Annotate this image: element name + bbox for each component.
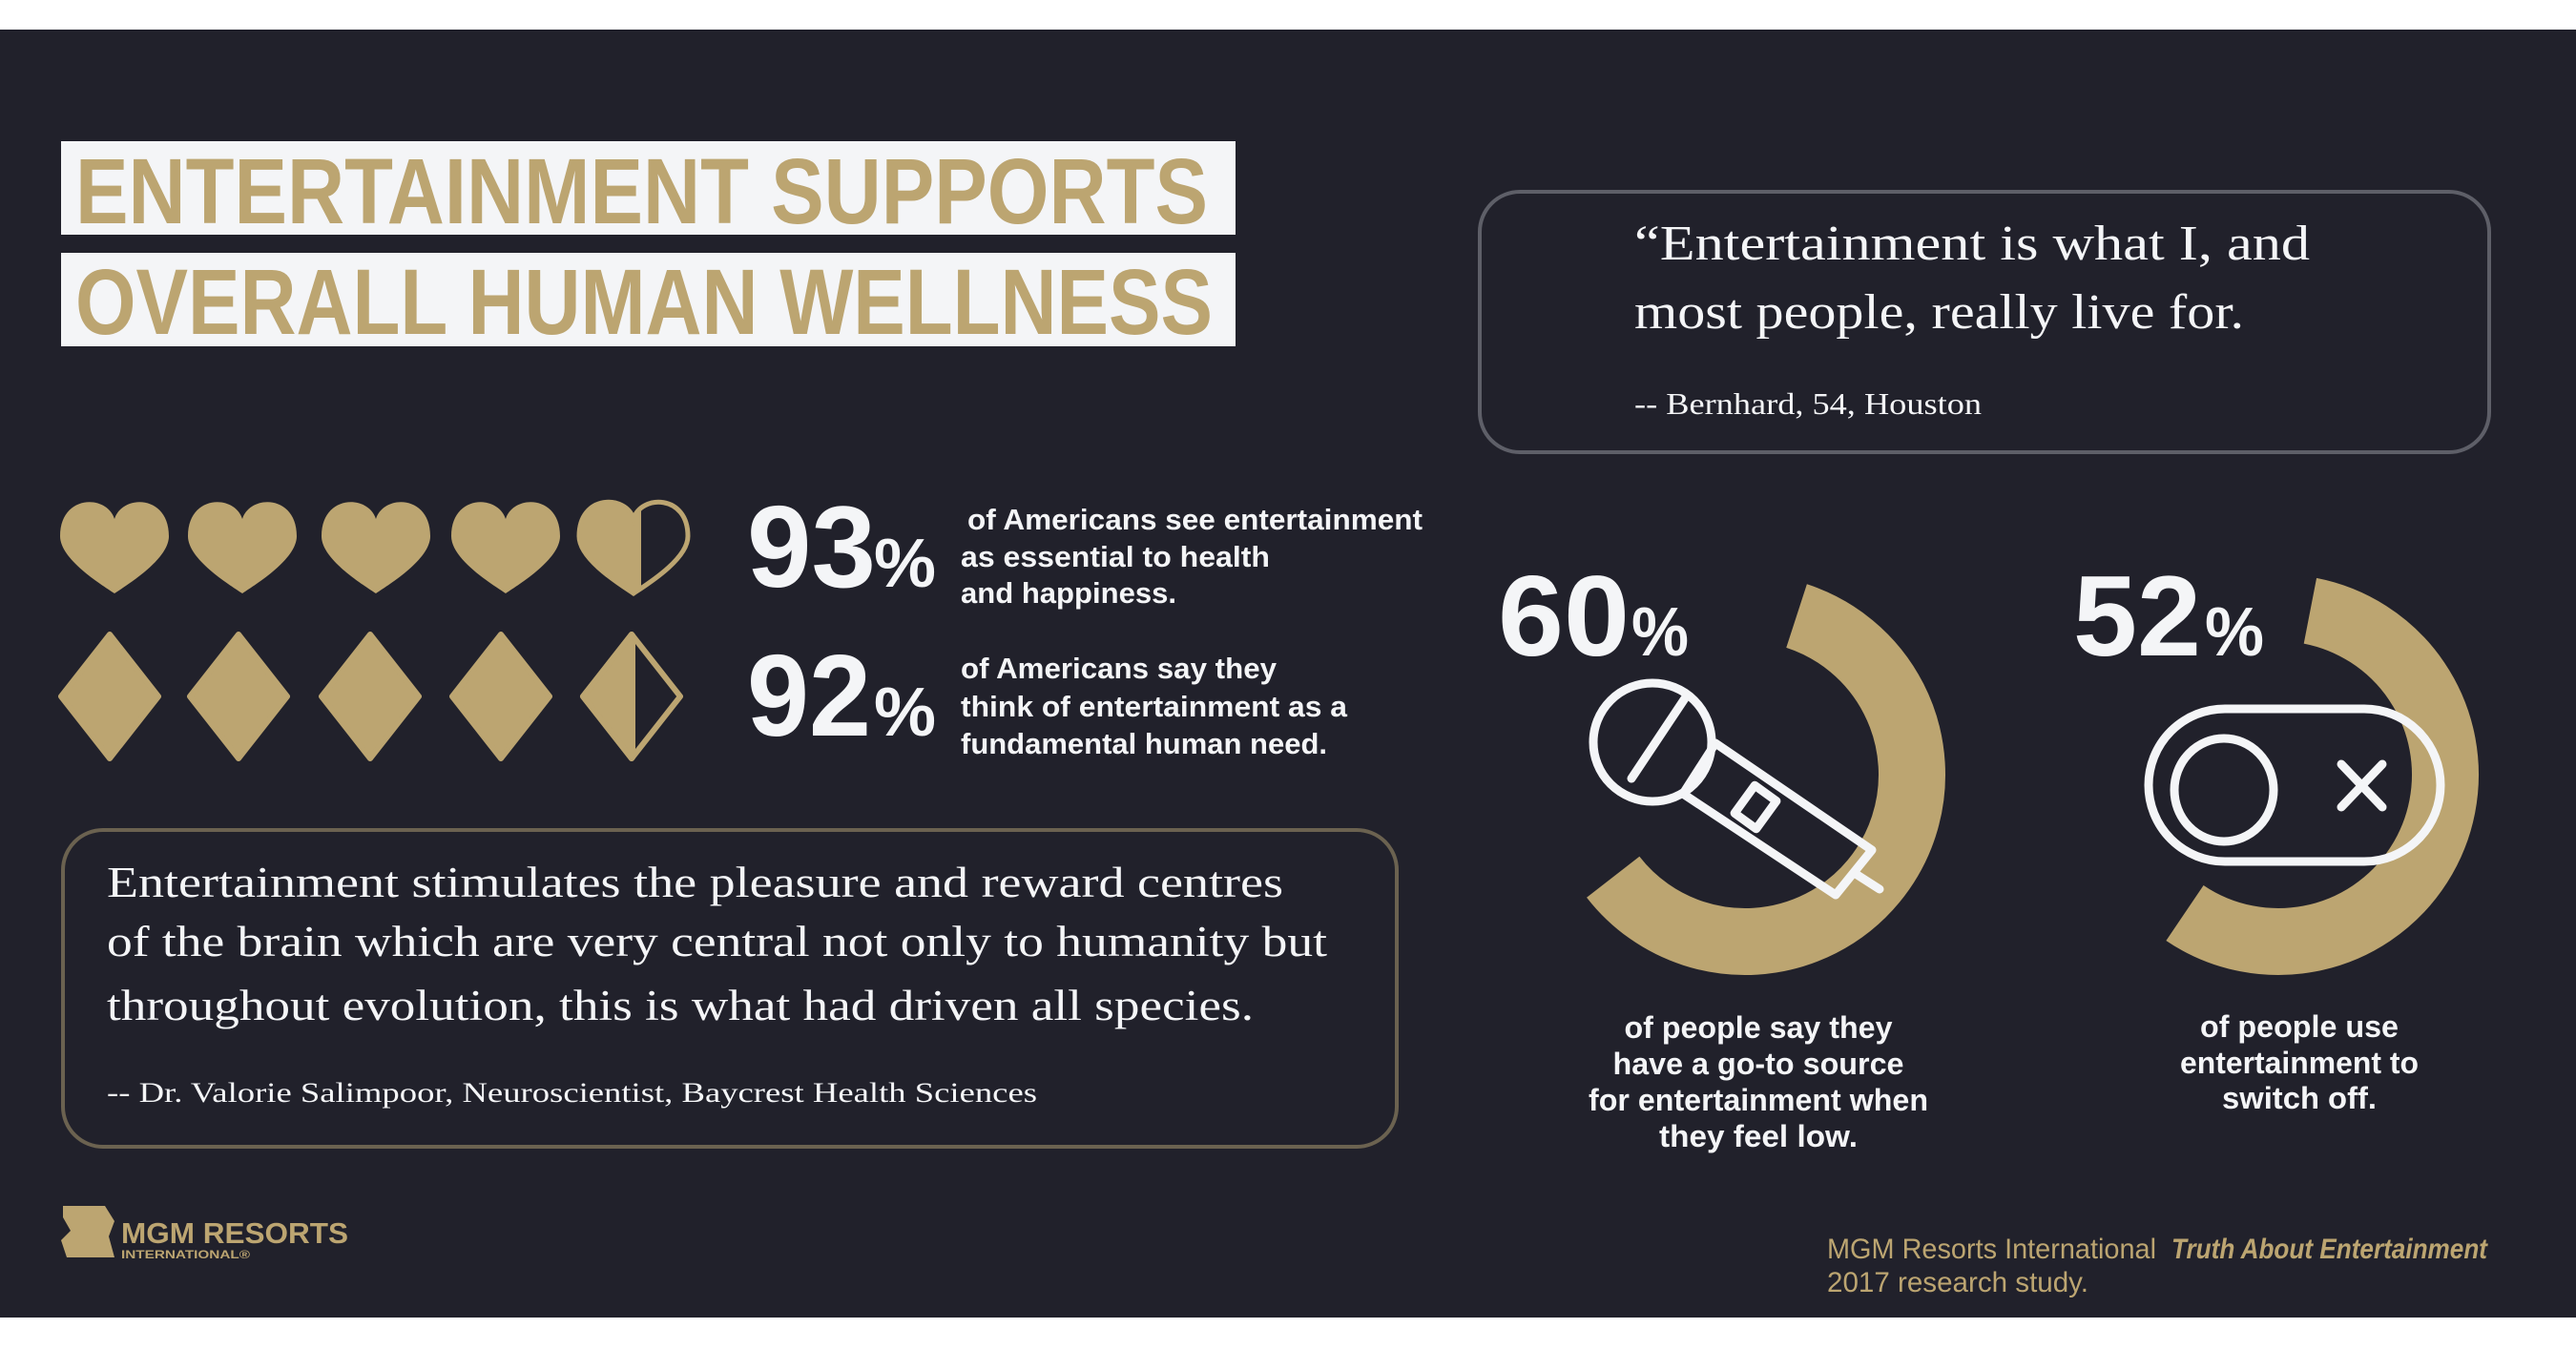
quote box: Bernhard: most people, really live for. <box>1634 285 2244 340</box>
caption: 60%: for entertainment when <box>1589 1083 1928 1117</box>
stat 92%: think of entertainment as a <box>961 690 1348 723</box>
caption: 52%: of people use <box>2200 1009 2399 1044</box>
donut chart: 52%: % <box>2205 594 2264 671</box>
logo: MGM Resorts <box>61 1206 348 1261</box>
footer source: 2017 research study. <box>1827 1267 2088 1298</box>
quote box: neuroscientist: of the brain which are very central not only to humanity but <box>107 918 1328 965</box>
icon: toggle switch <box>2149 709 2441 861</box>
caption: 60%: have a go-to source <box>1612 1047 1904 1081</box>
caption: 60%: they feel low. <box>1659 1119 1858 1153</box>
caption: 60%: of people say they <box>1624 1010 1893 1045</box>
icon row: diamonds <box>61 634 680 758</box>
stat 93%: of Americans see entertainment <box>967 503 1423 536</box>
quote box: neuroscientist: -- Dr. Valorie Salimpoor, Neuroscientist, Baycrest Health Sciences <box>107 1077 1037 1109</box>
logo: MGM Resorts: INTERNATIONAL® <box>121 1248 250 1261</box>
caption: 60% <box>1589 1010 1928 1153</box>
footer source: Truth About Entertainment <box>2171 1234 2489 1265</box>
donut chart: 60%: % <box>1631 594 1689 671</box>
stat 92%: 92 <box>747 631 871 760</box>
stat 93%: and happiness. <box>961 576 1176 610</box>
quote box: neuroscientist: throughout evolution, this is what had driven all species. <box>107 982 1254 1029</box>
donut chart: 52% <box>2073 552 2474 970</box>
stat 92%: fundamental human need. <box>961 727 1327 760</box>
quote box: neuroscientist <box>63 830 1397 1147</box>
stat 93%: 93 <box>747 482 876 612</box>
quote box: Bernhard <box>1480 192 2489 452</box>
logo: MGM Resorts: MGM RESORTS <box>121 1216 348 1250</box>
title: OVERALL HUMAN WELLNESS <box>75 250 1213 354</box>
quote box: Bernhard: “Entertainment is what I, and <box>1634 217 2310 271</box>
caption: 52% <box>2180 1009 2419 1115</box>
stat 93%: % <box>874 526 936 602</box>
stat 93%: as essential to health <box>961 540 1270 573</box>
caption: 52%: switch off. <box>2222 1081 2377 1115</box>
title <box>61 139 1236 354</box>
stat 92% <box>747 631 1348 760</box>
quote box: Bernhard: -- Bernhard, 54, Houston <box>1634 386 1982 421</box>
quote box: neuroscientist: Entertainment stimulates the pleasure and reward centres <box>107 859 1283 906</box>
footer source: MGM Resorts International <box>1827 1234 2156 1265</box>
stat 92%: of Americans say they <box>961 652 1278 685</box>
stat 92%: % <box>874 674 936 751</box>
footer source <box>1827 1234 2489 1298</box>
donut chart: 60%: 60 <box>1498 552 1630 680</box>
caption: 52%: entertainment to <box>2180 1046 2419 1080</box>
stat 93% <box>747 482 1423 612</box>
donut chart: 60% <box>1498 552 1956 986</box>
title: ENTERTAINMENT SUPPORTS <box>75 139 1208 243</box>
icon: microphone <box>1593 683 1880 895</box>
donut chart: 52%: 52 <box>2073 552 2201 680</box>
icon row: hearts <box>60 502 688 593</box>
